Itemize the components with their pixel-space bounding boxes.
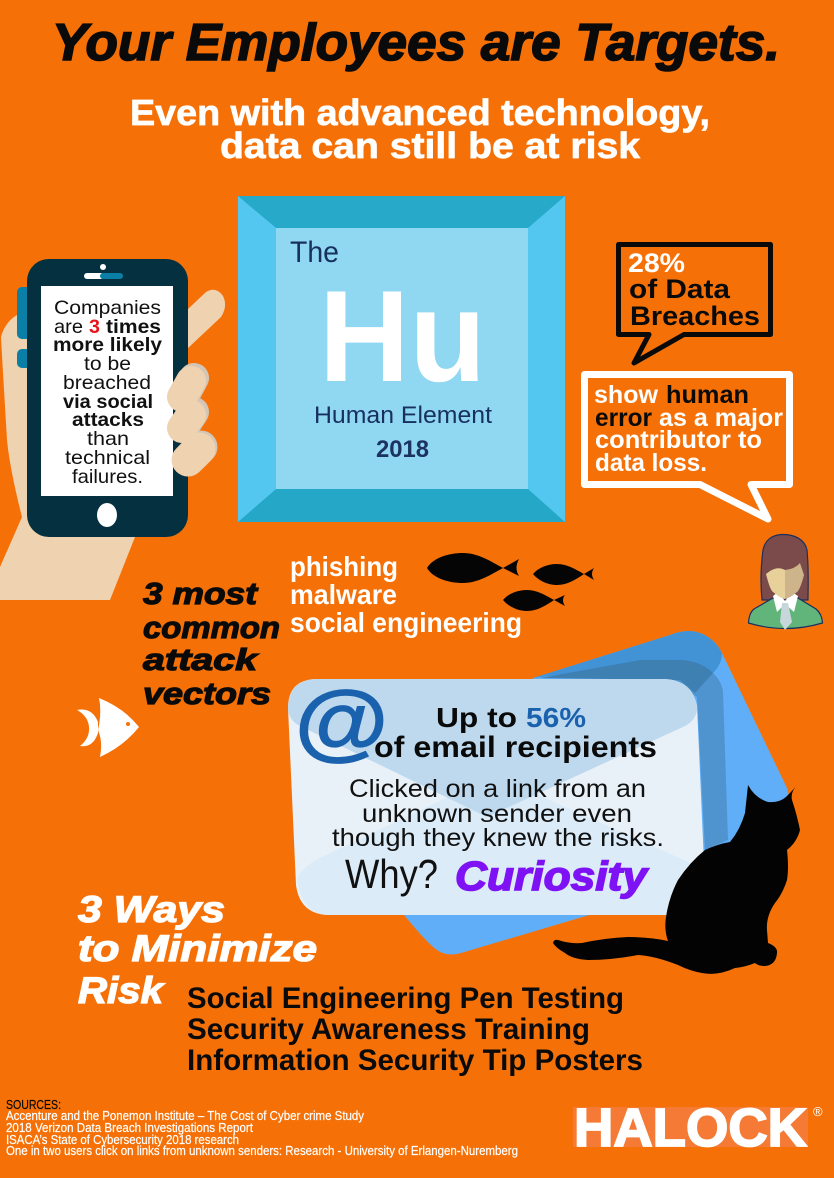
heading: 3 ways to minimize risk: Risk xyxy=(78,970,166,1011)
attack types list xyxy=(290,551,522,638)
sources: ISACA’s State of Cybersecurity 2018 research xyxy=(6,1133,239,1147)
subtitle: data can still be at risk xyxy=(220,125,641,166)
email body text xyxy=(332,775,664,852)
heading: 3 ways to minimize risk: to Minimize xyxy=(78,928,317,969)
element tile: Hu: Hu xyxy=(319,263,486,409)
speech bubble: human error: data loss. xyxy=(595,449,707,477)
email heading xyxy=(374,702,657,764)
sources: One in two users click on links from unknown senders: Research - University of Erlangen-Nuremberg xyxy=(6,1144,518,1158)
speech bubble: human error xyxy=(584,374,790,519)
speech bubble: 28% of data breaches xyxy=(618,244,770,363)
phone screen text: via social xyxy=(63,391,153,413)
speech bubble: 28% of data breaches: 28% xyxy=(628,248,685,278)
element tile: Hu: 2018 xyxy=(376,436,429,463)
phone screen text: than xyxy=(87,428,129,450)
element tile: Hu xyxy=(238,196,565,522)
phone screen text xyxy=(53,297,162,488)
sources xyxy=(6,1098,518,1158)
attack types list: social engineering xyxy=(290,607,522,638)
list: ways to minimize risk: Information Security Tip Posters xyxy=(187,1044,643,1077)
envelope front card xyxy=(288,679,705,915)
phone screen text: failures. xyxy=(72,466,143,488)
email heading: of email recipients xyxy=(374,731,657,764)
phone screen text: technical xyxy=(65,447,150,469)
curiosity text: Curiosity xyxy=(455,853,649,899)
phone screen text: 3 xyxy=(89,316,100,338)
email body text: though they knew the risks. xyxy=(332,824,664,852)
list: ways to minimize risk xyxy=(187,982,643,1077)
attack types list: phishing xyxy=(290,551,398,582)
phone screen xyxy=(41,286,173,496)
email body text: unknown sender even xyxy=(362,800,632,828)
icon: phone side buttons xyxy=(17,287,33,368)
phone screen text: breached xyxy=(63,372,151,394)
email heading: Up to xyxy=(436,702,517,733)
phone screen text: are xyxy=(54,316,83,338)
heading: 3 most common attack vectors xyxy=(143,576,280,711)
logo: HALOCK: ® xyxy=(813,1104,823,1119)
speech bubble: human error: error xyxy=(595,404,652,432)
envelope back xyxy=(404,631,790,954)
phone screen text: more likely xyxy=(53,334,162,356)
sources: SOURCES: xyxy=(6,1098,61,1112)
icon: hand and arm xyxy=(0,310,135,600)
element tile: Hu: The xyxy=(290,236,339,269)
phone home button xyxy=(97,503,117,527)
phone and hand illustration xyxy=(0,259,225,600)
email body text: Clicked on a link from an xyxy=(349,775,646,803)
subtitle xyxy=(130,92,710,166)
speech bubble: human error: as a major xyxy=(659,404,783,432)
email heading: 56% xyxy=(526,702,586,733)
why text: Why? xyxy=(345,851,438,897)
speech bubble: human error: human xyxy=(666,381,749,409)
speech bubble: 28% of data breaches: of Data xyxy=(629,274,731,304)
element tile: Hu: Human Element xyxy=(314,402,492,429)
list: ways to minimize risk: Security Awareness Training xyxy=(187,1013,590,1046)
attack types list: malware xyxy=(290,579,397,610)
phone speaker xyxy=(84,264,123,279)
icon: three fingers xyxy=(182,378,201,460)
subtitle: Even with advanced technology, xyxy=(130,92,710,133)
speech bubble: human error: contributor to xyxy=(595,426,762,454)
phone screen text: to be xyxy=(84,353,131,375)
logo: HALOCK: HALOCK xyxy=(574,1098,807,1158)
icon: white fish xyxy=(77,698,139,757)
email envelope xyxy=(288,631,790,954)
heading: 3 ways to minimize risk: 3 Ways xyxy=(78,889,225,930)
icon: index finger xyxy=(187,290,225,349)
icon: woman avatar xyxy=(748,534,822,630)
title: Your Employees are Targets. xyxy=(52,14,780,72)
speech bubble: human error: show xyxy=(594,381,659,409)
list: ways to minimize risk: Social Engineering Pen Testing xyxy=(187,982,624,1015)
heading: 3 most common attack vectors: 3 most xyxy=(143,576,259,611)
sources: Accenture and the Ponemon Institute – The Cost of Cyber crime Study xyxy=(6,1109,365,1123)
icon: phone body xyxy=(27,259,188,537)
icon: at sign: @ xyxy=(293,676,387,770)
heading: 3 ways to minimize risk xyxy=(78,889,317,1011)
phone screen text: times xyxy=(106,316,161,338)
heading: 3 most common attack vectors: vectors xyxy=(143,676,271,711)
speech bubble: 28% of data breaches: Breaches xyxy=(630,301,760,331)
icon: three black fish xyxy=(427,553,594,611)
phone screen text: Companies xyxy=(54,297,161,319)
phone screen text: attacks xyxy=(72,409,144,431)
icon: black cat xyxy=(553,784,800,974)
heading: 3 most common attack vectors: attack xyxy=(143,642,259,677)
sources: 2018 Verizon Data Breach Investigations Report xyxy=(6,1121,253,1135)
heading: 3 most common attack vectors: common xyxy=(143,610,280,645)
